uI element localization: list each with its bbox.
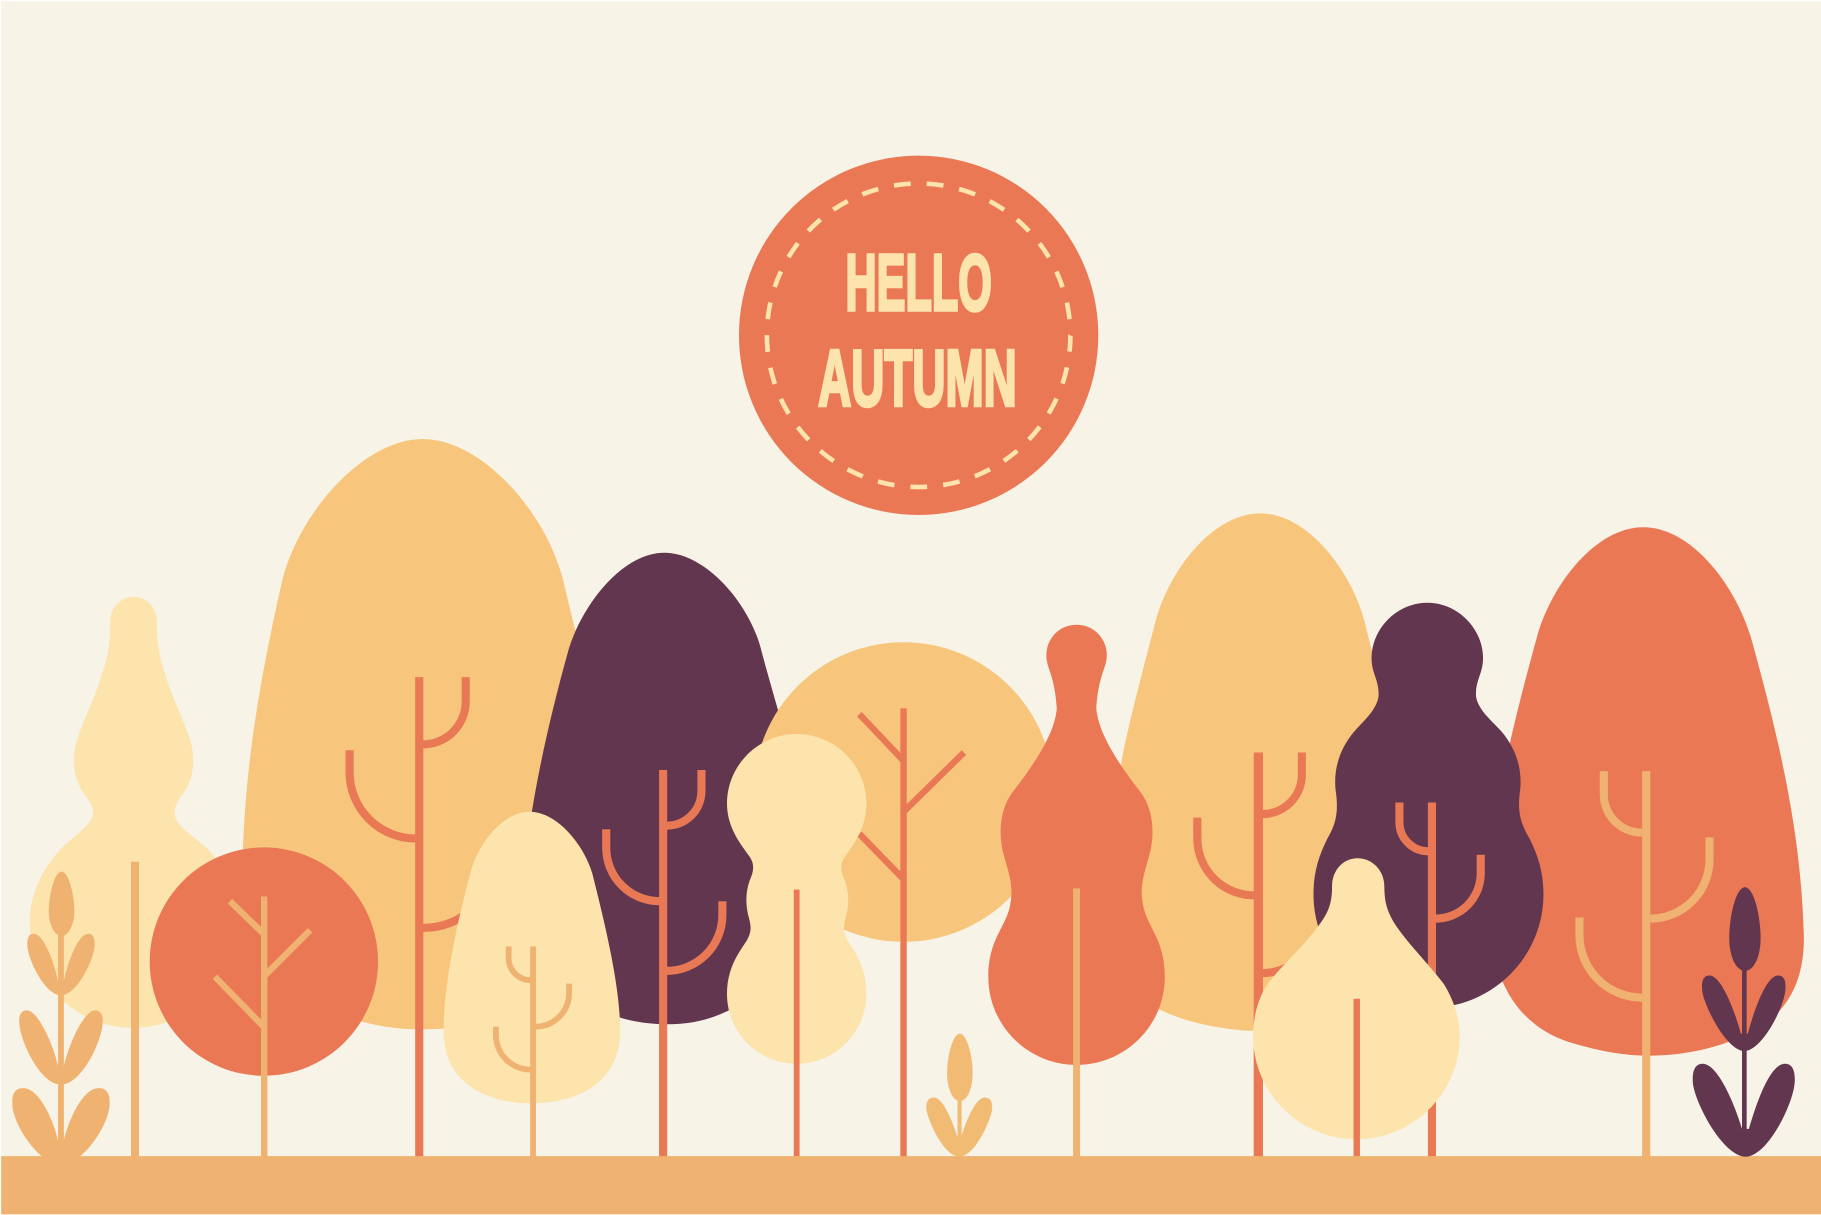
tree: round yellow [754, 642, 1053, 1157]
crown [150, 847, 378, 1076]
trunk and branches [606, 770, 722, 1157]
crown [526, 553, 808, 1024]
trunk [1354, 999, 1360, 1157]
crown [1488, 527, 1804, 1056]
bud [947, 1034, 973, 1101]
crown [243, 439, 616, 1029]
leaves [926, 1097, 992, 1157]
crown [1313, 603, 1543, 1008]
title: autumn: AUTUMN [818, 333, 1017, 422]
badge circle [739, 156, 1098, 515]
bud [49, 872, 74, 936]
trunk and branches [496, 946, 569, 1157]
tree: round orange [150, 847, 378, 1157]
stem [958, 1086, 962, 1150]
lower leaves [12, 1088, 110, 1165]
plant: left sprig [12, 872, 110, 1165]
bud [1729, 887, 1761, 971]
crown [444, 812, 620, 1103]
stem [1742, 958, 1747, 1138]
tree: cream pear [1253, 858, 1460, 1157]
crown [30, 597, 241, 1028]
tree: yellow right [1113, 513, 1411, 1157]
plant: right purple sprig [1693, 887, 1795, 1157]
tree: salmon right [1488, 527, 1804, 1157]
dashed ring [767, 183, 1070, 487]
badge: hello autumn [739, 156, 1098, 515]
ground [1, 1156, 1821, 1214]
trunk [794, 890, 800, 1157]
trunk and branches [1399, 802, 1481, 1157]
plant: middle sprig [926, 1034, 992, 1157]
trunk [131, 862, 139, 1157]
title: hello: HELLO [845, 238, 992, 327]
upper leaves [1702, 976, 1786, 1051]
crown [988, 625, 1165, 1065]
crown [1113, 513, 1411, 1031]
trunk and branches [859, 708, 964, 1157]
trunk [1073, 888, 1080, 1157]
middle leaves [19, 1010, 103, 1085]
tree: purple right [1313, 603, 1543, 1157]
lower leaves [1693, 1064, 1795, 1157]
tree: purple centre [526, 553, 808, 1157]
tree: cream left [30, 597, 241, 1157]
tree: large yellow [243, 439, 616, 1157]
crown [1253, 858, 1460, 1139]
crown [727, 734, 866, 1064]
trunk and branches [350, 677, 474, 1157]
tree: small cream [444, 812, 620, 1157]
upper leaves [27, 934, 95, 995]
crown [754, 642, 1053, 942]
tree: cream peanut [727, 734, 866, 1157]
stem [58, 917, 64, 1157]
trunk and branches [1579, 771, 1710, 1157]
trunk and branches [215, 897, 310, 1157]
trunk and branches [1197, 753, 1302, 1157]
tree: orange gourd [988, 625, 1165, 1157]
